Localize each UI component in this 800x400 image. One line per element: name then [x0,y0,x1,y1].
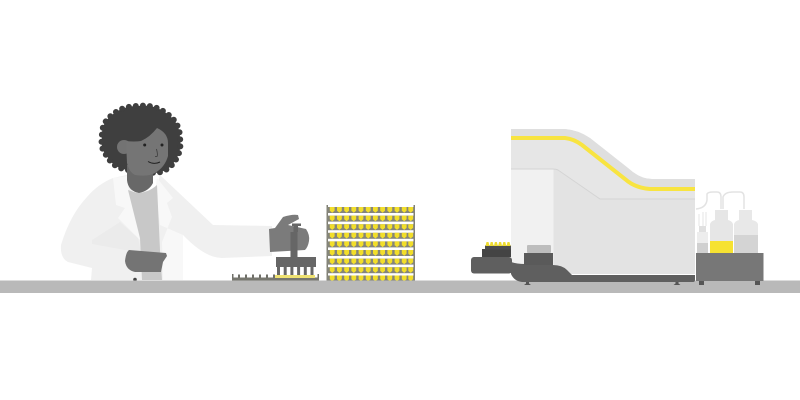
neck [127,165,153,193]
analyser instrument [471,129,695,285]
pipette tip rack stack [326,205,415,282]
hair [102,106,180,173]
coat right lapel [155,178,183,280]
small bottle [697,212,708,253]
gloved hand [269,215,309,252]
tubing [696,192,744,209]
eyes [143,144,146,146]
front panel [511,169,554,274]
base feet [524,282,680,285]
middle bottle [710,210,733,253]
bench [0,280,800,293]
upper cover [511,136,695,199]
tip tray on bench [232,274,319,280]
face [117,128,168,176]
instrument base [511,262,695,282]
shirt [128,185,162,280]
carousel lid [527,245,551,253]
nose [155,149,157,156]
smile [148,162,160,163]
cover seam [511,169,695,199]
instrument body [511,129,695,274]
reagent bottles and tray [696,192,764,285]
tray feet [699,281,760,285]
pipette [276,224,316,275]
tray [696,253,764,281]
carousel block [524,253,553,265]
coat left lapel [113,176,140,240]
yellow stripe [511,138,695,189]
sample shelf [471,257,512,274]
cover top band [511,129,695,188]
coat button [133,278,137,281]
sample rack [482,242,511,257]
right bottle [734,210,758,253]
lab coat [61,175,272,280]
scientist [61,106,272,281]
coat fold [92,222,141,252]
left hand [125,250,167,272]
